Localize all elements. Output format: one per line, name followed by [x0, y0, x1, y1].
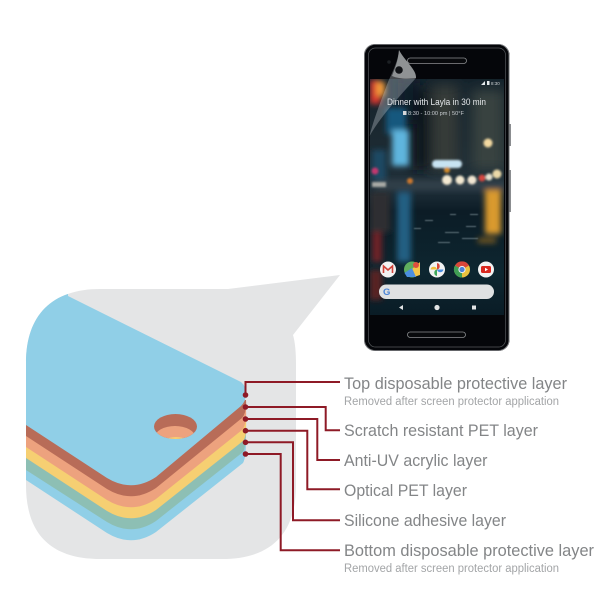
- connector: silicone adhesive layer: [243, 440, 340, 520]
- label: bottom disposable protective layer: Bottom disposable protective layer: [344, 541, 594, 560]
- sublabel: bottom layer note: Removed after screen protector application: [344, 563, 559, 575]
- speaker top: [408, 58, 466, 64]
- app icon: Maps: [404, 262, 420, 278]
- speaker bottom: [408, 332, 466, 338]
- connector lines and dots: [243, 382, 340, 550]
- label: scratch resistant PET layer: Scratch resistant PET layer: [344, 421, 538, 440]
- rain reflections: [414, 214, 478, 243]
- app icon: Photos: [429, 262, 445, 278]
- app icon: Gmail: [380, 262, 396, 278]
- status bar: [481, 81, 490, 85]
- connector: top disposable layer: [243, 382, 340, 398]
- layer: anti-UV acrylic layer: [26, 400, 246, 507]
- connector: bottom disposable layer: [243, 451, 340, 550]
- layer: top disposable protective layer: [26, 290, 246, 485]
- diagram: screen protector layer stack: [26, 290, 246, 540]
- protector outline: [368, 48, 506, 347]
- peeling film corner: [370, 50, 416, 136]
- phone screen wallpaper: [370, 79, 505, 315]
- callout: gray zoom bubble: [26, 275, 340, 559]
- phone: [364, 44, 511, 351]
- search bar: [379, 284, 494, 299]
- label: optical PET layer: Optical PET layer: [344, 481, 467, 500]
- phone screen wallpaper: 8:30: [491, 81, 500, 86]
- app icon: Chrome: [454, 261, 470, 278]
- layer: scratch resistant PET layer: [26, 400, 246, 496]
- camera dots: [387, 60, 391, 64]
- connector: scratch resistant layer: [243, 404, 340, 430]
- connector: anti-UV layer: [243, 416, 340, 460]
- phone body: [364, 44, 510, 351]
- date-time text: Dinner with Layla in 30 min: [387, 97, 486, 108]
- connector: optical PET layer: [243, 428, 340, 489]
- layer: optical PET layer: [26, 422, 246, 518]
- icon: camera cut-out hole: [154, 414, 197, 439]
- label: silicone adhesive layer: Silicone adhesive layer: [344, 511, 506, 530]
- layer: silicone adhesive layer: [26, 434, 246, 530]
- label: top disposable protective layer: Top disposable protective layer: [344, 374, 567, 393]
- sublabel: top layer note: Removed after screen protector application: [344, 396, 559, 408]
- label: anti-UV acrylic layer: Anti-UV acrylic layer: [344, 451, 488, 470]
- side buttons: [509, 124, 511, 212]
- navigation buttons: [399, 305, 476, 310]
- phone screen wallpaper: 8:30 - 10:00 pm | 50°F: [408, 111, 465, 117]
- layer: bottom disposable protective layer: [26, 445, 246, 540]
- app icon: YouTube: [478, 262, 494, 278]
- search bar: G: [383, 287, 390, 298]
